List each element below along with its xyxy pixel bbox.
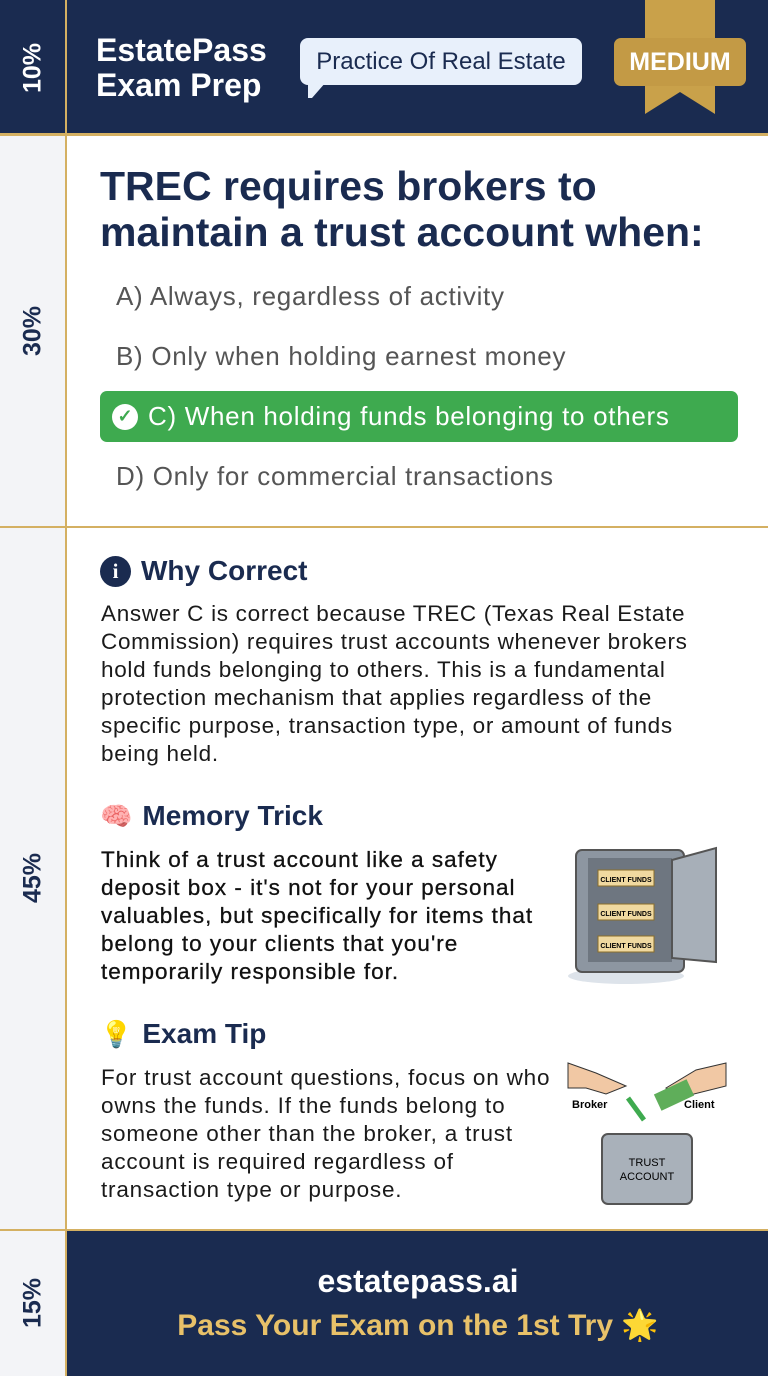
icon: safe [568, 846, 717, 984]
sidebar: 30%: 30% [18, 306, 46, 356]
sidebar: 15%: 15% [18, 1278, 46, 1328]
icon: safe: CLIENT FUNDS [600, 911, 652, 918]
text: memory trick: deposit box - it's not for your personal [101, 875, 516, 900]
question title: TREC requires brokers to [100, 163, 597, 209]
text: memory trick: Think of a trust account like a safety [101, 847, 498, 872]
text: why correct: hold funds belonging to others. This is a fundamental [101, 657, 666, 682]
text: why correct [101, 601, 688, 766]
brand title: Exam Prep [96, 67, 261, 103]
difficulty ribbon badge: MEDIUM [629, 48, 731, 76]
sidebar: 45% [0, 528, 67, 1229]
explanation section [0, 528, 768, 1231]
icon: trust account handoff: Broker [572, 1099, 608, 1111]
brand title [96, 32, 267, 103]
brand title: EstatePass [96, 32, 267, 68]
sidebar: 10%: 10% [18, 43, 46, 93]
text: memory trick [100, 847, 533, 984]
text: why correct: being held. [101, 741, 219, 766]
icon: safe: CLIENT FUNDS [600, 877, 652, 884]
icon: trust account handoff: Client [684, 1099, 715, 1111]
text: memory trick: temporarily responsible for. [101, 959, 399, 984]
text: memory trick: valuables, but specifically for items that [101, 903, 533, 928]
icon: trust account handoff [568, 1062, 726, 1205]
footer band [0, 1231, 768, 1376]
text: exam tip: transaction type or purpose. [101, 1177, 402, 1202]
sidebar: 45%: 45% [18, 853, 46, 903]
footer site: estatepass.ai [317, 1263, 518, 1299]
heading: memory trick: Memory Trick [142, 800, 323, 831]
heading: exam tip: 💡 [100, 1018, 132, 1048]
text: exam tip [101, 1065, 550, 1202]
question title [100, 163, 704, 255]
text: why correct: specific purpose, transaction type, or amount of funds [101, 713, 673, 738]
sidebar: 30% [0, 136, 67, 526]
text: why correct: Commission) requires trust accounts whenever brokers [101, 629, 688, 654]
footer tagline: Pass Your Exam on the 1st Try 🌟 [177, 1309, 659, 1342]
icon: safe: CLIENT FUNDS [600, 943, 652, 950]
icon: trust account handoff: TRUST [629, 1157, 666, 1169]
difficulty ribbon badge [614, 0, 746, 114]
sidebar: 10% [0, 0, 67, 136]
icon: trust account handoff: ACCOUNT [620, 1171, 674, 1183]
text: memory trick: belong to your clients that you're [101, 931, 458, 956]
option A: A) Always, regardless of activity [116, 281, 505, 311]
option C correct: ✓ [117, 406, 133, 426]
text: exam tip: For trust account questions, focus on who [101, 1065, 550, 1090]
question section [0, 136, 768, 528]
option C correct [100, 391, 738, 442]
text: exam tip: owns the funds. If the funds belong to [101, 1093, 505, 1118]
text: why correct: protection mechanism that applies regardless of the [101, 685, 652, 710]
text: exam tip: someone other than the broker, a trust [101, 1121, 513, 1146]
heading: why correct: i [113, 558, 118, 582]
question title: maintain a trust account when: [100, 209, 704, 255]
option D: D) Only for commercial transactions [116, 461, 554, 491]
heading: exam tip: Exam Tip [142, 1018, 266, 1049]
category bubble: Practice Of Real Estate [316, 48, 566, 74]
sidebar: 15% [0, 1231, 67, 1376]
heading: memory trick: 🧠 [100, 800, 132, 830]
text: why correct: Answer C is correct because TREC (Texas Real Estate [101, 601, 685, 626]
text: exam tip: account is required regardless of [101, 1149, 454, 1174]
header band [0, 0, 768, 136]
heading: why correct: Why Correct [141, 555, 307, 586]
option B: B) Only when holding earnest money [116, 341, 566, 371]
category bubble [300, 38, 582, 85]
option C correct: C) When holding funds belonging to others [148, 401, 670, 431]
